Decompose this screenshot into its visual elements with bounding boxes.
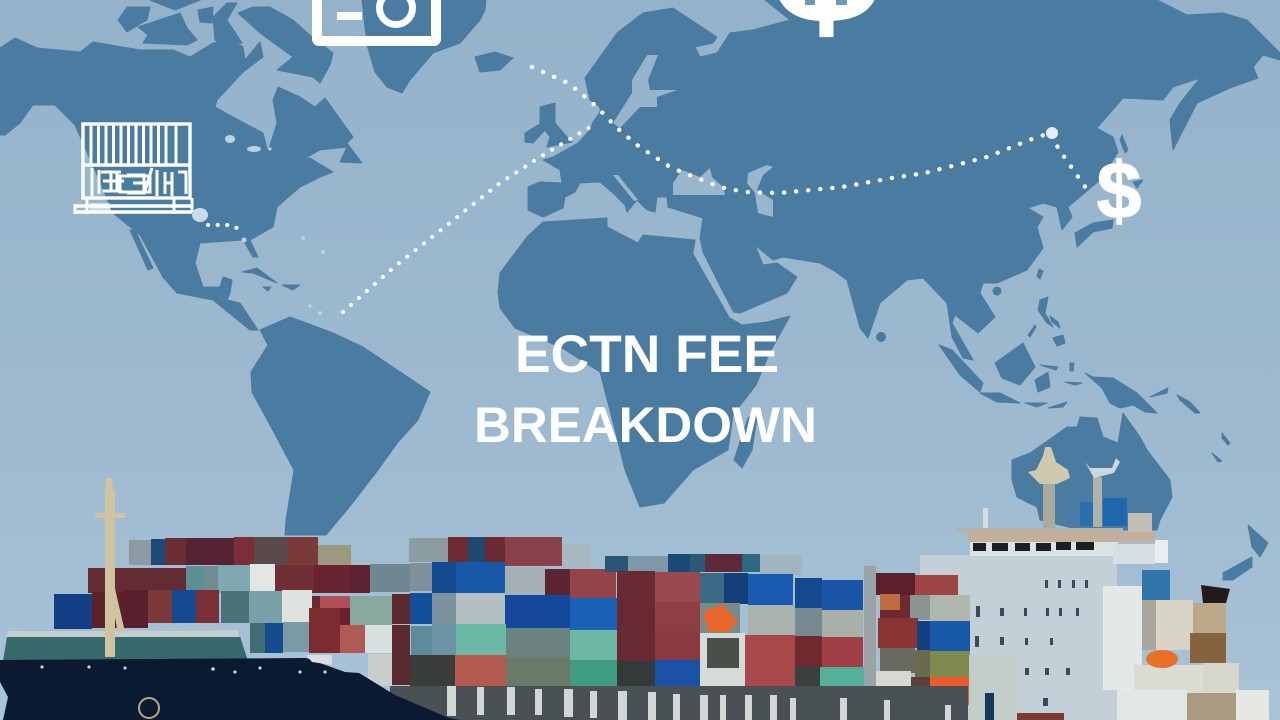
container ship: [0, 447, 1269, 720]
ship: bridge mast and tanks: [983, 447, 1152, 540]
title line 2: BREAKDOWN: [474, 397, 817, 453]
ship: superstructure: [920, 528, 1170, 720]
map: iceland: [475, 52, 513, 72]
route: faint inland blotches: [225, 135, 325, 315]
map: baja california: [130, 230, 153, 270]
ship: lower block: [969, 655, 1064, 720]
ship: aft structures: [1117, 585, 1269, 720]
title line 1: ECTN FEE: [515, 325, 779, 384]
map: southeast asia islands: [939, 297, 1230, 462]
map: taiwan and hainan: [993, 269, 1043, 295]
ship: forward deck block: [3, 630, 248, 661]
icon: container outline: [75, 124, 192, 214]
map: great britain: [540, 103, 572, 147]
map: sakhalin and japan: [1075, 135, 1143, 247]
map: africa: [498, 218, 790, 507]
ship: containers left: [54, 537, 410, 686]
map: ireland: [525, 122, 545, 143]
ship: lifeboat centre: [703, 604, 738, 632]
route: west coast to gulf: [208, 225, 245, 228]
map: north america: [0, 38, 362, 330]
map: caribbean islands: [242, 268, 300, 291]
ship: lower deck pillars: [390, 686, 968, 720]
map: new zealand: [1223, 525, 1268, 580]
ship: containers right: [605, 554, 970, 705]
map: sri lanka: [876, 332, 886, 342]
ship: hull: [0, 655, 460, 720]
ship: containers centre: [409, 537, 618, 691]
map: inland seas: [257, 55, 773, 318]
map: madagascar: [734, 412, 758, 468]
title: [474, 325, 817, 453]
route: dotted shipping line: [208, 67, 1088, 312]
map: greenland: [362, 0, 486, 93]
route: europe to japan: [532, 67, 1088, 193]
route: panama to europe: [343, 123, 597, 312]
ship: bow mast: [95, 478, 126, 657]
map: arctic islands: [118, 0, 333, 83]
route node: asia: [1046, 127, 1058, 139]
icon: camera-like document: [317, 0, 436, 41]
ship: aft lifeboat: [1146, 650, 1178, 668]
map: eurasia: [528, 0, 1280, 360]
route node: west coast: [192, 208, 208, 222]
map: south america: [251, 317, 430, 535]
ship: crane post: [864, 566, 876, 720]
icon: dollar sign: $: [1097, 146, 1141, 235]
map: australia: [1012, 413, 1172, 530]
